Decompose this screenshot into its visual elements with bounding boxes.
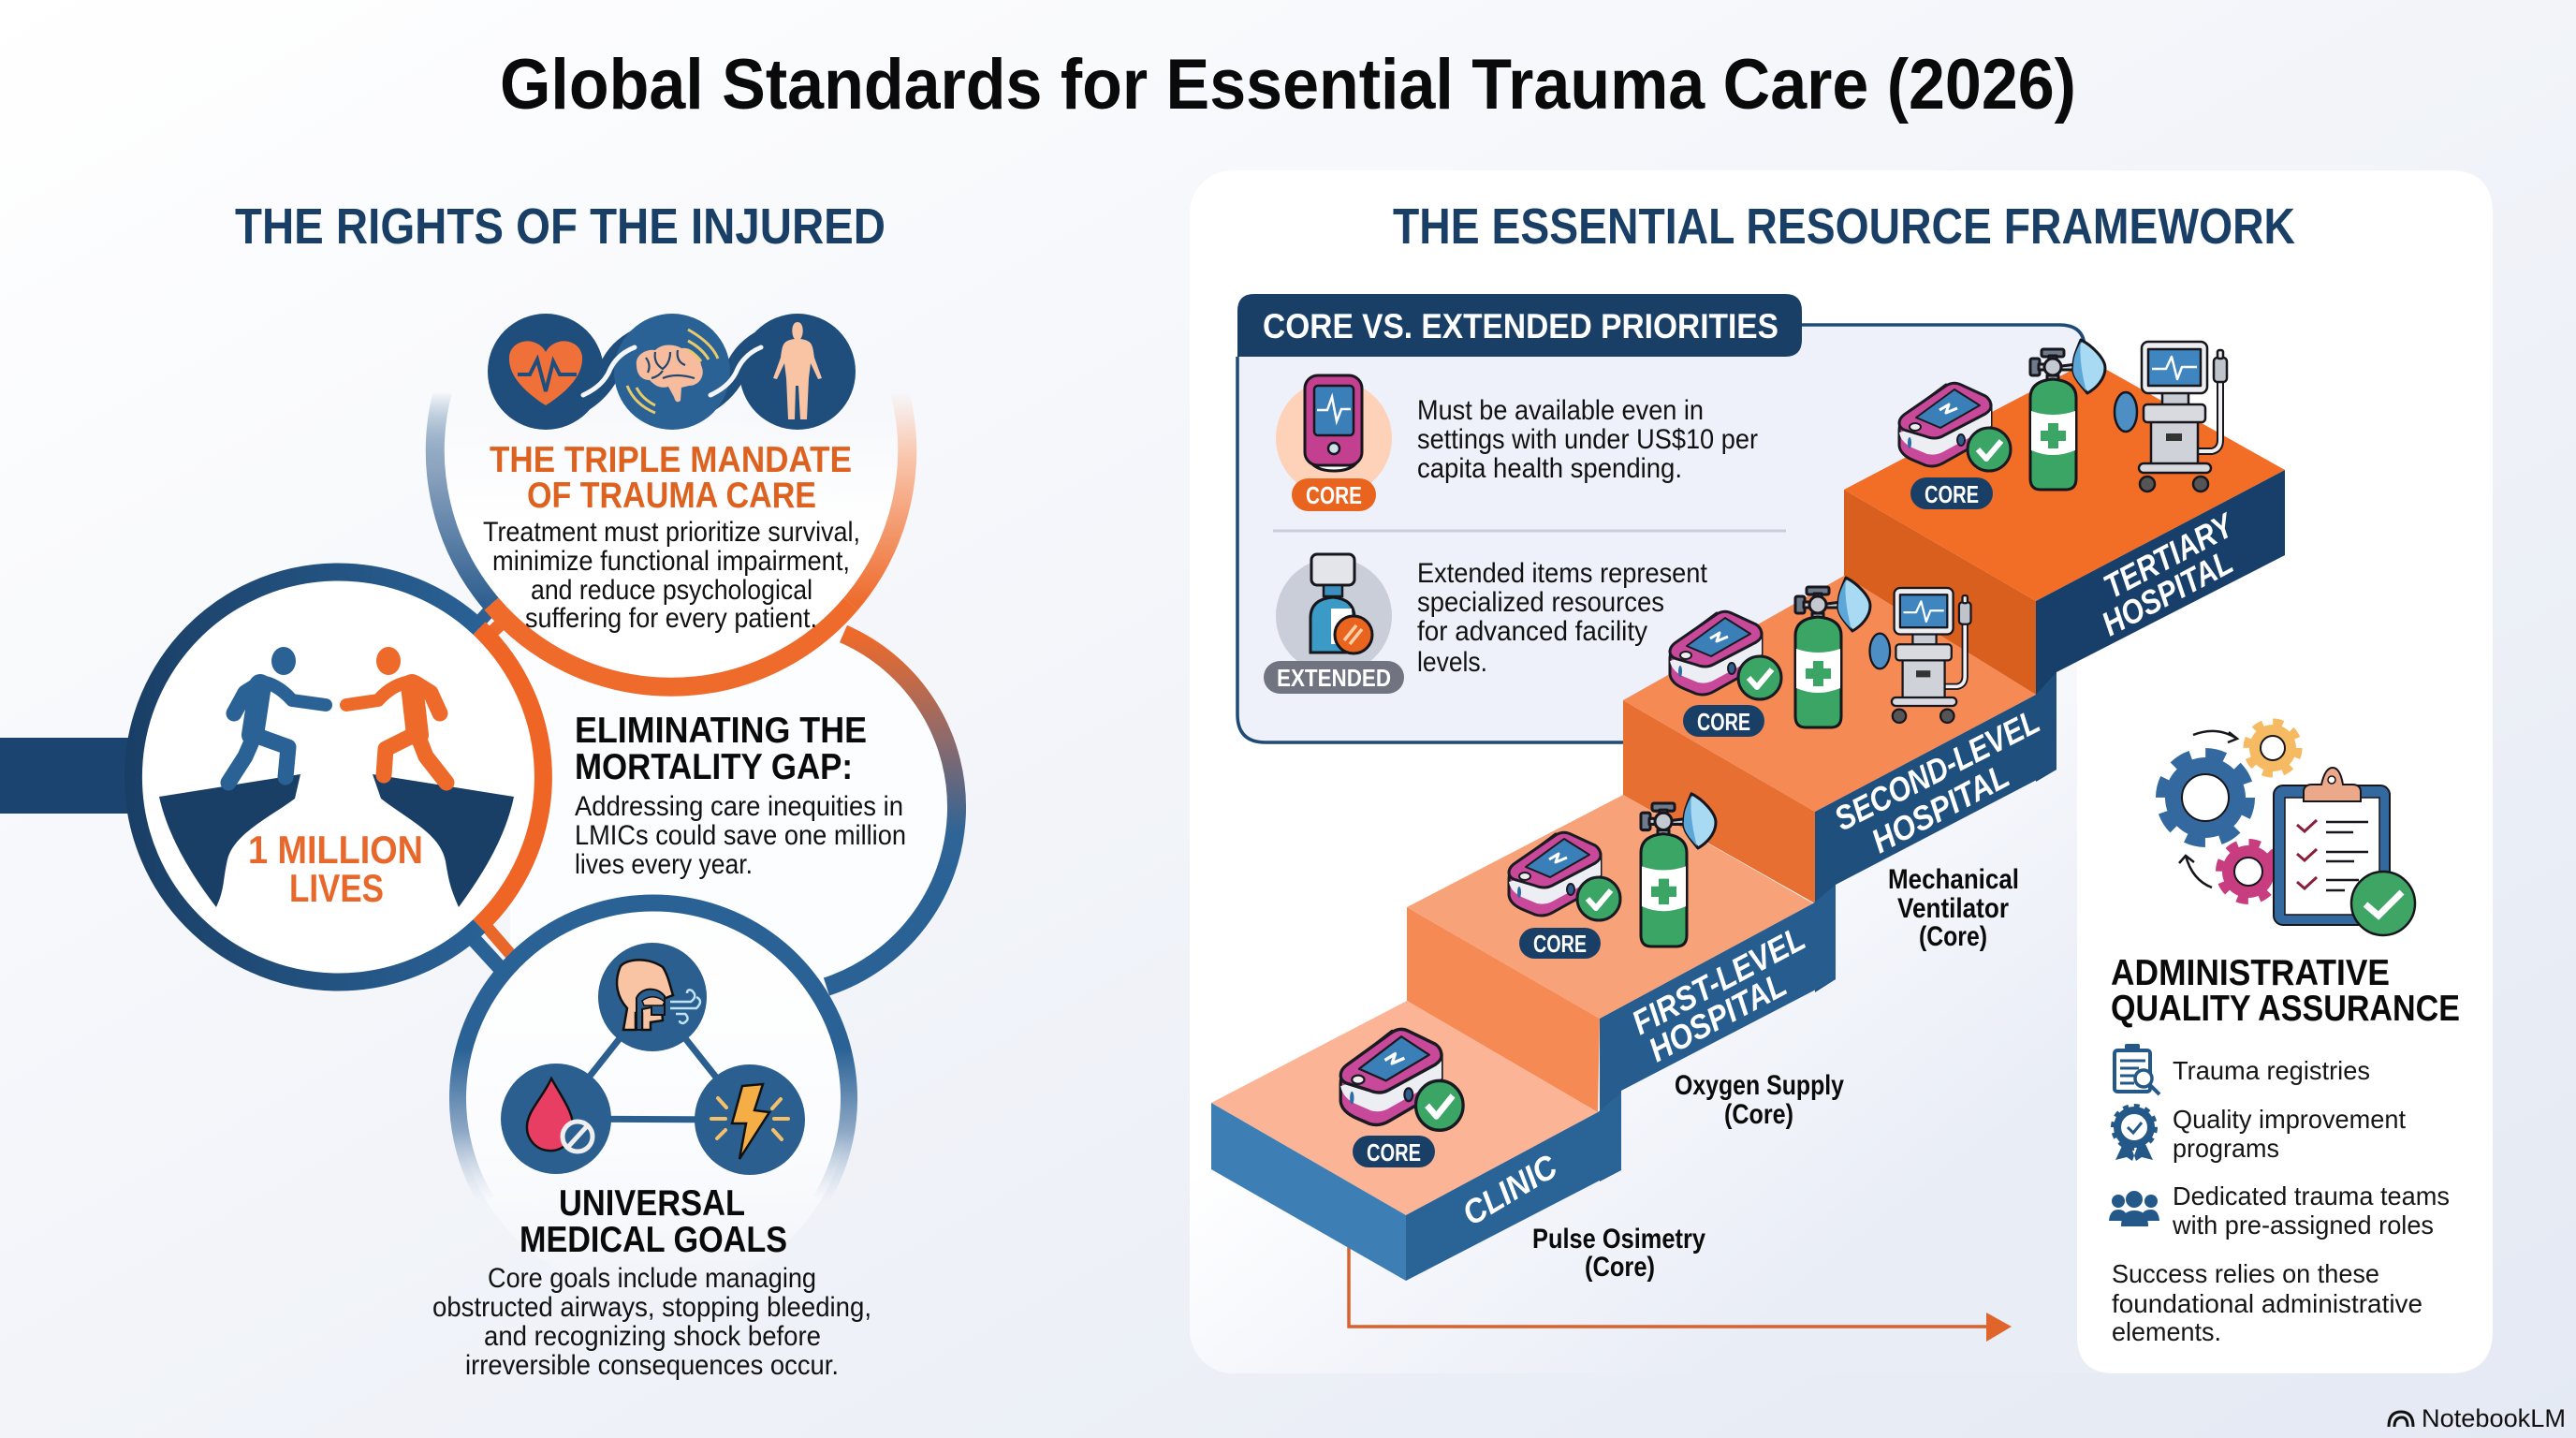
label: pulse oximetry xyxy=(1532,1224,1705,1283)
step: clinic: CLINIC xyxy=(1456,1147,1564,1233)
icon: blood drop xyxy=(501,1064,611,1174)
header: core vs extended priorities: CORE VS. EXTENDED PRIORITIES xyxy=(1263,307,1778,345)
text: universal medical goals body xyxy=(432,1263,871,1381)
text: quality improvement programs: Quality improvement xyxy=(2173,1105,2406,1134)
text: 1 million lives: LIVES xyxy=(289,866,384,910)
icon: blue gear xyxy=(2162,755,2248,841)
text: trauma registries: Trauma registries xyxy=(2173,1056,2370,1085)
text: success statement xyxy=(2112,1259,2422,1346)
heading: universal medical goals: MEDICAL GOALS xyxy=(520,1220,787,1260)
text: universal medical goals body: obstructed airways, stopping bleeding, xyxy=(432,1292,871,1323)
icon: oxygen tank xyxy=(2030,340,2105,490)
heading: triple mandate xyxy=(490,440,852,516)
step: clinic xyxy=(1211,1001,1621,1281)
text: 1 million lives: 1 MILLION xyxy=(248,828,423,872)
icon: heart xyxy=(488,314,604,430)
label: mechanical ventilator: (Core) xyxy=(1919,921,1987,952)
badge: core: CORE xyxy=(1697,708,1750,736)
step: first-level hospital xyxy=(1407,795,1836,1181)
heading: eliminating the mortality gap: ELIMINATING THE xyxy=(575,711,867,751)
bar: left connector xyxy=(0,738,140,814)
icon: blue figure reaching xyxy=(228,647,326,783)
connector junctions xyxy=(471,607,518,970)
text: extended description xyxy=(1417,558,1708,678)
label: oxygen supply: Oxygen Supply xyxy=(1675,1070,1844,1101)
heading: the rights of the injured: THE RIGHTS OF THE INJURED xyxy=(235,198,886,255)
equipment: second level xyxy=(1670,578,1971,737)
badge: core: CORE xyxy=(1925,480,1979,508)
panel: triple mandate circle xyxy=(435,215,907,687)
equipment: clinic xyxy=(1340,1029,1463,1167)
label: pulse oximetry: Pulse Osimetry xyxy=(1532,1224,1705,1255)
label: mechanical ventilator: Mechanical xyxy=(1888,864,2019,895)
header: core vs extended priorities xyxy=(1237,294,1802,357)
text: extended description: levels. xyxy=(1417,647,1487,678)
icon: oxygen tank xyxy=(1641,794,1716,946)
icon: brain xyxy=(614,314,730,430)
left panel: rights of the injured ring diagram xyxy=(0,215,957,1381)
badge: core: CORE xyxy=(1306,481,1362,509)
badge: core: CORE xyxy=(1367,1138,1421,1167)
text: core description xyxy=(1417,395,1758,484)
heading: administrative quality assurance: ADMINISTRATIVE xyxy=(2111,953,2390,993)
heading: universal medical goals: UNIVERSAL xyxy=(559,1183,745,1224)
panel: universal medical goals circle xyxy=(458,902,849,1295)
text: dedicated trauma teams: with pre-assigned roles xyxy=(2172,1211,2434,1240)
text: mortality gap body: LMICs could save one million xyxy=(575,820,906,851)
text: triple mandate body: suffering for every patient. xyxy=(525,603,817,634)
panel: administrative background xyxy=(2077,170,2493,1373)
icon: pulse oximeter xyxy=(1899,383,2011,471)
text: core description: capita health spending. xyxy=(1417,453,1682,484)
icon: extended bottle xyxy=(1276,554,1392,674)
text: quality improvement programs xyxy=(2173,1105,2406,1163)
label: mechanical ventilator: Ventilator xyxy=(1897,893,2009,924)
icons: universal medical goals triangle xyxy=(501,943,805,1175)
step: tertiary hospital: HOSPITAL xyxy=(2096,543,2239,643)
panel: eliminating the mortality gap xyxy=(510,618,957,996)
icon: ventilator xyxy=(1870,588,1971,723)
text: extended description: Extended items represent xyxy=(1417,558,1708,589)
step: second-level hospital xyxy=(1623,576,2056,992)
text: universal medical goals body: Core goals include managing xyxy=(488,1263,816,1294)
step: second-level hospital: HOSPITAL xyxy=(1866,756,2015,860)
text: triple mandate body: minimize functional impairment, xyxy=(492,546,850,577)
label: oxygen supply xyxy=(1675,1070,1844,1130)
text: mortality gap body xyxy=(575,791,906,880)
heading: administrative quality assurance xyxy=(2111,953,2460,1029)
heading: triple mandate: THE TRIPLE MANDATE xyxy=(490,440,852,480)
icon: lightning shock xyxy=(695,1064,805,1175)
title: Global Standards for Essential Trauma Care (2026) xyxy=(500,45,2076,125)
arrow: progression xyxy=(1349,1236,2012,1342)
text: success statement: Success relies on these xyxy=(2112,1259,2379,1288)
icon: airway xyxy=(598,943,707,1051)
step: second-level hospital: SECOND-LEVEL xyxy=(1828,702,2045,838)
icon: core device xyxy=(1276,375,1392,496)
panel: one million lives circle xyxy=(133,572,543,982)
text: universal medical goals body: and recognizing shock before xyxy=(484,1321,821,1352)
icon: human body xyxy=(739,314,856,430)
icon: clipboard xyxy=(2274,768,2415,935)
icon: gears and clipboard xyxy=(2162,723,2415,935)
link highlight lines xyxy=(583,347,761,395)
icon: magenta gear xyxy=(2220,844,2276,900)
icon: trauma registries xyxy=(2115,1044,2159,1094)
icon: right cliff xyxy=(373,774,514,907)
badge: core: CORE xyxy=(1533,930,1587,958)
text: 1 million lives xyxy=(248,828,423,910)
text: quality improvement programs: programs xyxy=(2173,1134,2279,1163)
heading: eliminating the mortality gap xyxy=(575,711,867,787)
text: triple mandate body xyxy=(483,517,860,634)
icon: left cliff xyxy=(159,774,300,907)
step: first-level hospital: HOSPITAL xyxy=(1643,965,1793,1069)
heading: essential resource framework: THE ESSENTIAL RESOURCE FRAMEWORK xyxy=(1393,198,2295,255)
text: core description: settings with under US$10 per xyxy=(1417,424,1758,455)
text: mortality gap body: lives every year. xyxy=(575,849,753,880)
icon: trauma team xyxy=(2109,1191,2159,1226)
panel: essential resource framework xyxy=(1190,170,2493,1373)
icon: yellow gear xyxy=(2247,723,2298,773)
icons: triple mandate xyxy=(488,314,856,430)
icon: orange figure reaching xyxy=(346,647,446,783)
logo: notebooklm: NotebookLM xyxy=(2422,1404,2566,1432)
heading: triple mandate: OF TRAUMA CARE xyxy=(527,476,816,516)
text: dedicated trauma teams xyxy=(2172,1181,2450,1240)
icon: quality rosette xyxy=(2113,1106,2156,1161)
heading: eliminating the mortality gap: MORTALITY GAP: xyxy=(575,747,853,787)
label: pulse oximetry: (Core) xyxy=(1585,1252,1655,1283)
label: oxygen supply: (Core) xyxy=(1724,1099,1793,1130)
text: extended description: specialized resources xyxy=(1417,587,1664,618)
panel: core vs extended box xyxy=(1237,294,2085,742)
text: extended description: for advanced facility xyxy=(1417,616,1647,647)
icon: pulse oximeter xyxy=(1340,1029,1463,1130)
text: universal medical goals body: irreversible consequences occur. xyxy=(465,1350,839,1381)
badge: extended: EXTENDED xyxy=(1277,664,1391,692)
link ribbons between icons xyxy=(573,337,770,406)
icon: pulse oximeter xyxy=(1670,611,1781,699)
heading: administrative quality assurance: QUALITY ASSURANCE xyxy=(2111,989,2460,1029)
heading: universal medical goals xyxy=(520,1183,787,1260)
text: triple mandate body: and reduce psychological xyxy=(531,575,812,606)
icon: oxygen tank xyxy=(1795,578,1870,727)
text: triple mandate body: Treatment must prioritize survival, xyxy=(483,517,860,548)
text: core description: Must be available even in xyxy=(1417,395,1704,426)
step: first-level hospital: FIRST-LEVEL xyxy=(1626,919,1811,1042)
text: dedicated trauma teams: Dedicated trauma teams xyxy=(2173,1181,2450,1211)
text: mortality gap body: Addressing care inequities in xyxy=(575,791,903,822)
label: mechanical ventilator xyxy=(1888,864,2019,952)
equipment: first level xyxy=(1509,794,1716,959)
text: success statement: elements. xyxy=(2112,1317,2221,1346)
chart: stair step levels xyxy=(1211,360,2285,1281)
icon: pulse oximeter xyxy=(1509,832,1620,920)
step: tertiary hospital: TERTIARY xyxy=(2098,505,2241,606)
step: tertiary hospital xyxy=(1844,360,2285,782)
equipment: tertiary xyxy=(1899,340,2227,509)
icon: ventilator xyxy=(2115,342,2227,492)
text: success statement: foundational administrative xyxy=(2112,1289,2422,1318)
